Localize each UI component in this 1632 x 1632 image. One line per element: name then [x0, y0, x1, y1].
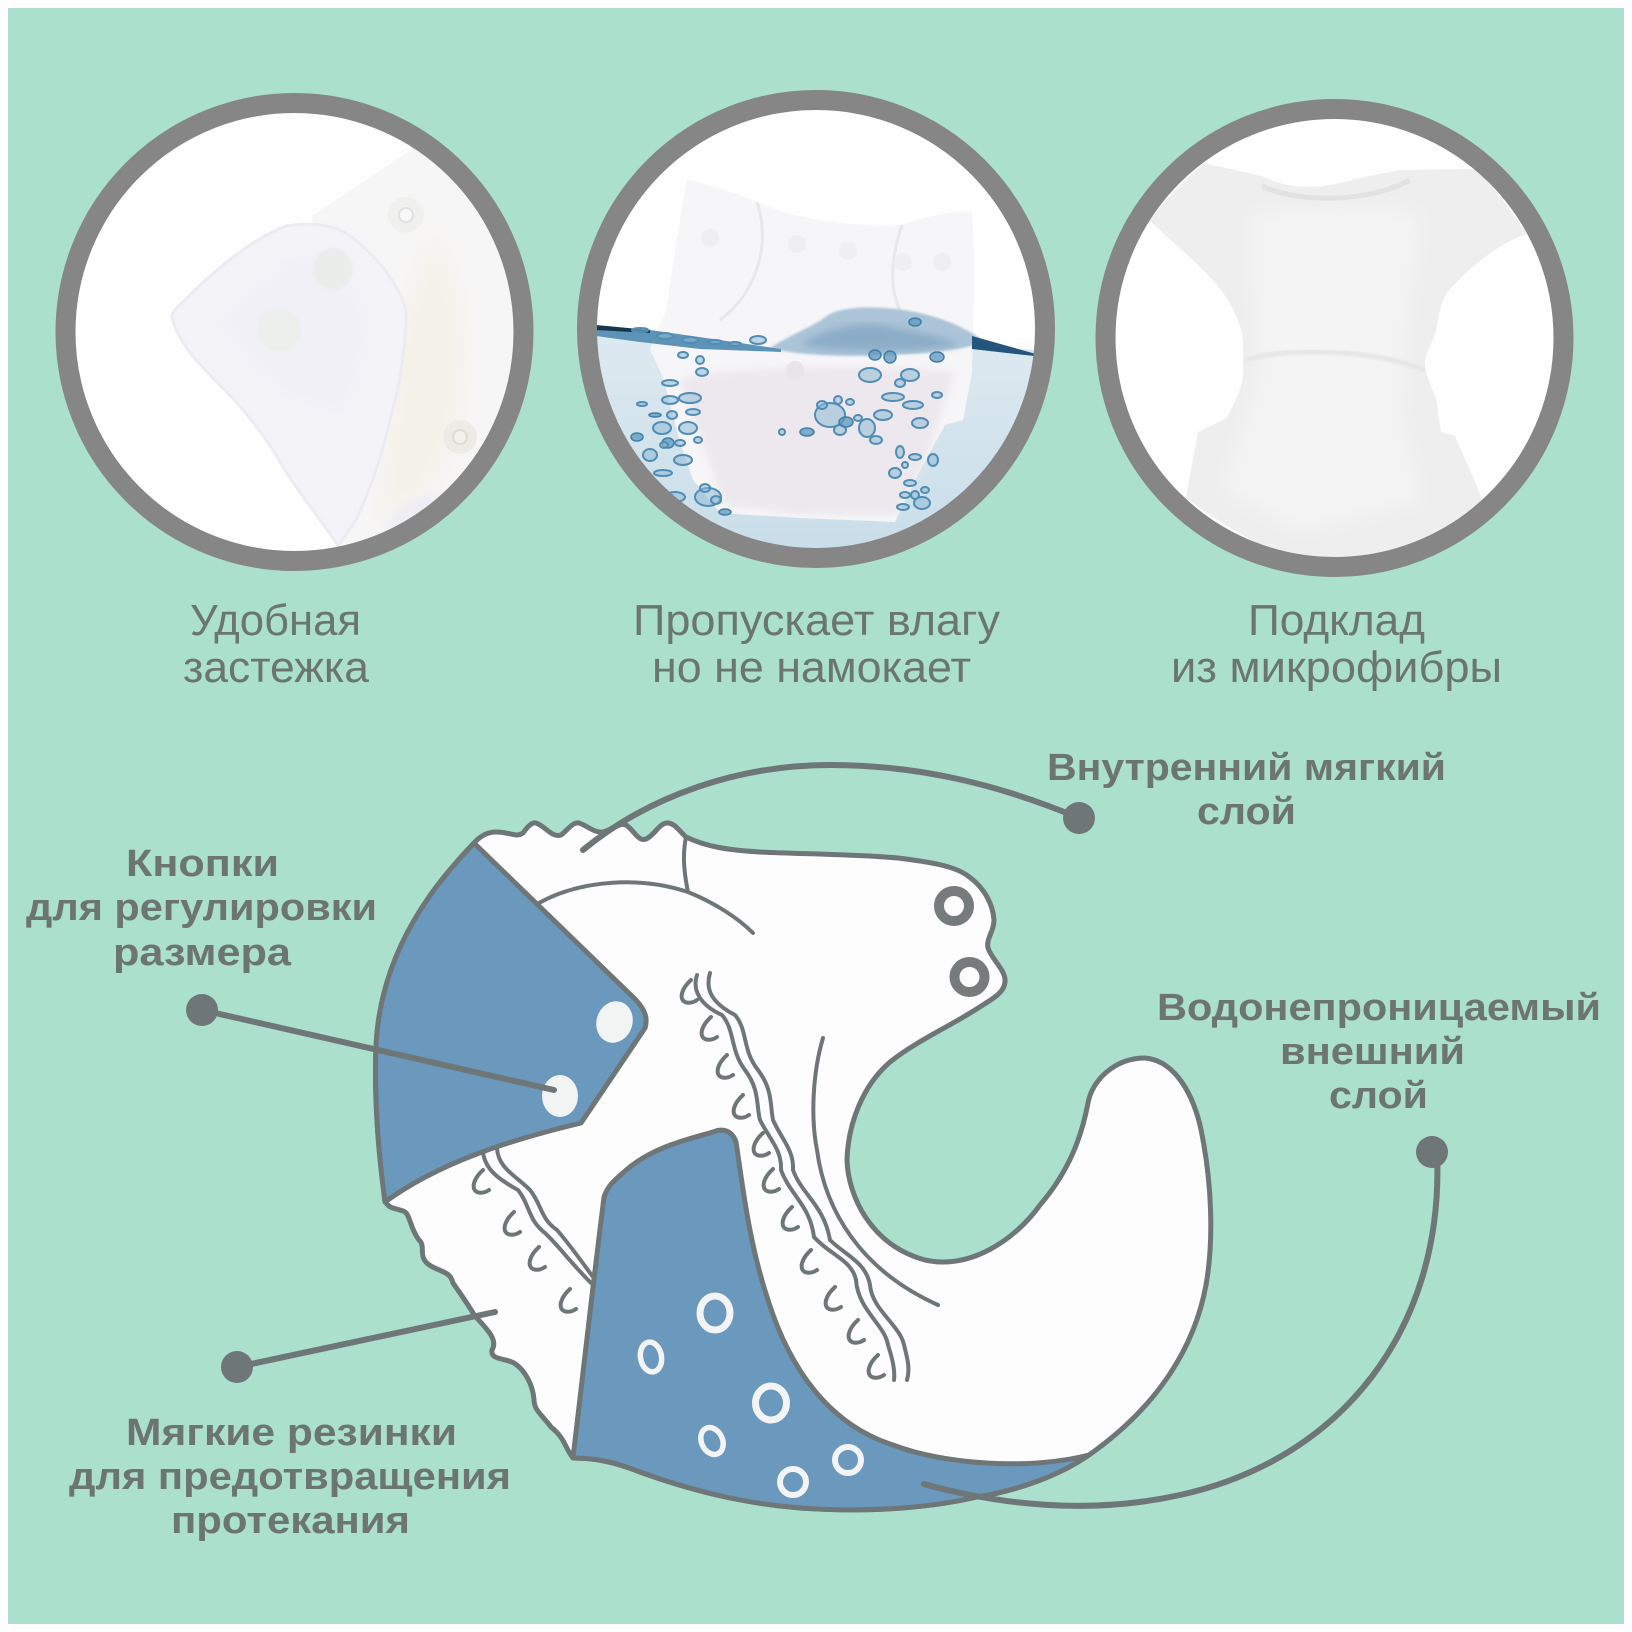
caption: fastener [183, 596, 370, 692]
label: soft elastics: Мягкие резинки [126, 1412, 457, 1454]
photo circle: snap fastener close-up [66, 103, 540, 561]
tab snap rings [939, 891, 984, 992]
leg elastic waves [483, 973, 908, 1380]
photo circle: moisture and water [580, 100, 1050, 560]
caption: moisture: Пропускает влагу [633, 596, 1000, 645]
leader: soft elastics [221, 1312, 495, 1383]
label: inner soft layer: слой [1197, 791, 1296, 833]
label: inner soft layer [1047, 747, 1446, 833]
caption: lining: Подклад [1248, 596, 1425, 645]
snap oval lower [542, 1075, 578, 1117]
leader: inner soft layer [583, 765, 1095, 850]
label: waterproof outer layer: внешний [1280, 1031, 1465, 1073]
diaper above water [650, 179, 974, 522]
snap oval upper [591, 996, 638, 1048]
bubbles [631, 318, 944, 515]
caption: moisture: но не намокает [652, 643, 971, 692]
snaps [313, 248, 353, 290]
back fabric [312, 147, 540, 546]
leader: adjustment snaps [186, 994, 554, 1090]
label: inner soft layer: Внутренний мягкий [1047, 747, 1446, 789]
caption: fastener: Удобная [190, 596, 361, 645]
photo circle: microfibre lining [1106, 109, 1564, 567]
diaper illustration [375, 823, 1211, 1510]
label: waterproof outer layer [1157, 987, 1601, 1117]
label: waterproof outer layer: Водонепроницаемый [1157, 987, 1601, 1029]
label: adjustment snaps: размера [113, 932, 292, 974]
blue lower panel with holes [573, 1130, 1089, 1510]
caption: fastener: застежка [183, 643, 370, 692]
label: soft elastics [69, 1412, 511, 1542]
caption: lining: из микрофибры [1171, 643, 1502, 692]
diaper white body [375, 823, 1211, 1510]
fold flap [172, 224, 406, 546]
leader: waterproof outer layer [924, 1136, 1448, 1506]
label: adjustment snaps: для регулировки [26, 887, 377, 929]
label: soft elastics: протекания [171, 1500, 410, 1542]
label: adjustment snaps: Кнопки [126, 843, 279, 885]
caption: moisture [633, 596, 1000, 692]
leg elastic hooks [474, 980, 884, 1378]
blue side panel with snaps [375, 843, 646, 1202]
waist seam lines [539, 837, 938, 1305]
splash [770, 307, 985, 356]
water body [597, 336, 1034, 548]
label: adjustment snaps [26, 843, 377, 974]
caption: lining [1171, 596, 1502, 692]
label: waterproof outer layer: слой [1329, 1075, 1428, 1117]
label: soft elastics: для предотвращения [69, 1456, 511, 1498]
